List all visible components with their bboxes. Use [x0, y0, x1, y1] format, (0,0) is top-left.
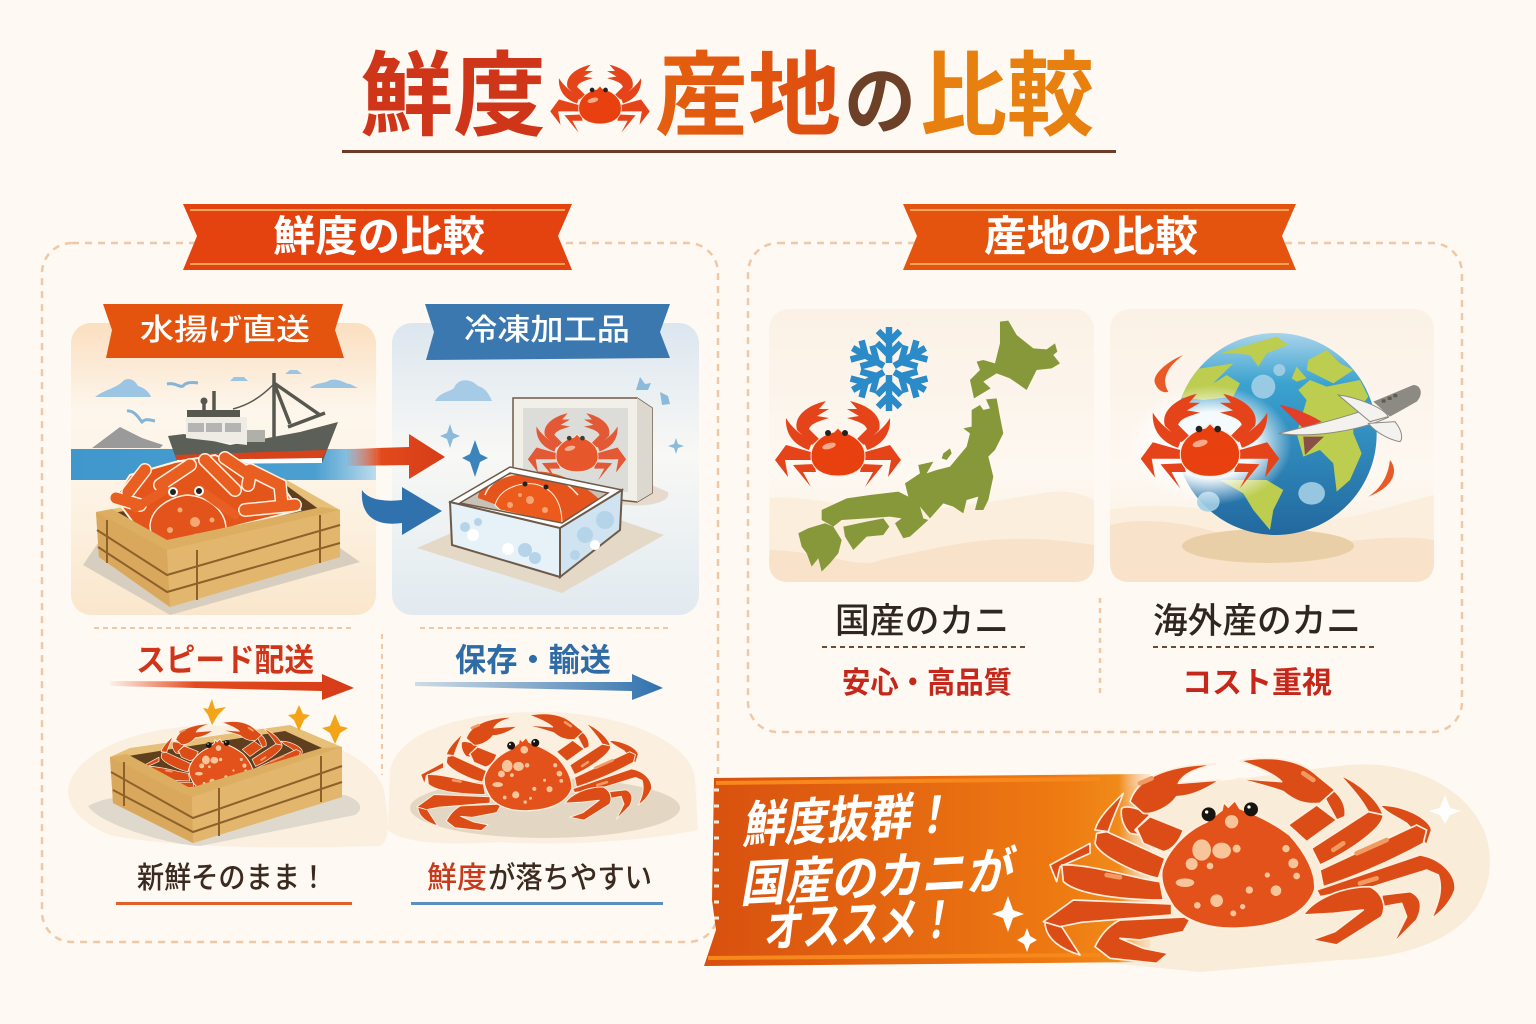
sea: [71, 449, 376, 480]
label: cost focus: コスト重視: [1182, 667, 1332, 700]
title: 鮮度: [360, 46, 546, 148]
icon: crab: [1141, 394, 1279, 488]
crate front: [96, 507, 340, 607]
motion marks: [1155, 355, 1394, 497]
foam box with crabs: [450, 467, 622, 528]
illustration: fresh crab crate: [68, 699, 388, 847]
icon: title crab: [550, 65, 650, 133]
callout text: オススメ！: [761, 892, 955, 958]
crate with crabs: [96, 455, 340, 607]
title: 比較: [920, 46, 1094, 148]
fishing boat: [168, 373, 338, 464]
crate front: [110, 747, 342, 843]
glow behind crab: [1128, 385, 1292, 505]
ribbon: frozen product: 冷凍加工品: [464, 314, 630, 347]
dividers: [94, 627, 672, 629]
arrow: blue to frozen card: [362, 487, 442, 535]
card: overseas crab: [1110, 309, 1434, 582]
dashed rule: domestic crab: [822, 646, 1028, 648]
label: storage and transport: 保存・輸送: [455, 642, 611, 678]
banner stripes: [708, 779, 1100, 958]
callout: recommendation banner: [704, 758, 1490, 972]
label: domestic crab: 国産のカニ: [835, 602, 1009, 641]
ribbon: direct from port: [103, 304, 344, 358]
ribbon: frozen product: [425, 304, 670, 360]
label: speed delivery: スピード配送: [136, 642, 314, 678]
underline: stays fresh: [116, 902, 352, 905]
panel: freshness comparison outline: [42, 243, 718, 942]
underline: freshness drops: [411, 902, 663, 905]
back box with frozen crab: [620, 480, 668, 506]
arrow: speed delivery: [110, 674, 354, 700]
callout text: 国産のカニが: [738, 842, 1020, 913]
heading ribbon: origin: 産地の比較: [984, 213, 1198, 260]
label: safe high quality: 安心・高品質: [842, 667, 1012, 700]
crate interior: [110, 725, 342, 797]
arrow: storage and transport: [415, 674, 663, 700]
illustration: frozen crab: [388, 712, 698, 844]
icon: crab: [775, 401, 901, 487]
dashed rule: overseas crab: [1153, 646, 1377, 648]
perforated edge: [714, 790, 719, 918]
clouds and birds: [95, 370, 358, 397]
title: [342, 46, 1116, 153]
caption: freshness drops: 鮮度: [427, 862, 487, 895]
ribbon: direct from port: 水揚げ直送: [140, 314, 310, 347]
illustration: large crab: [1043, 758, 1455, 963]
icon: airplane: [1278, 385, 1421, 455]
callout text: [738, 787, 1020, 958]
crab heap: [115, 455, 300, 545]
sparkles: [203, 699, 348, 744]
icon: globe: [1128, 333, 1421, 535]
sparkles: [462, 440, 488, 477]
icon: snowflake: [847, 327, 931, 411]
sparkles: [992, 795, 1461, 952]
heading ribbon: origin: [903, 204, 1296, 270]
title: 産地: [655, 46, 841, 148]
caption: stays fresh: 新鮮そのまま！: [137, 862, 327, 895]
crab: [417, 714, 652, 831]
card: frozen product: [392, 323, 699, 615]
panel: origin comparison outline: [748, 243, 1462, 732]
heading ribbon: freshness: 鮮度の比較: [273, 213, 485, 260]
heading ribbon: freshness: [183, 204, 572, 270]
label: overseas crab: 海外産のカニ: [1153, 602, 1361, 641]
map: Japan: [798, 321, 1060, 572]
caption: freshness drops: [427, 862, 652, 895]
cloud: [435, 380, 492, 401]
crate shadow: [83, 540, 360, 615]
caption: freshness drops: が落ちやすい: [488, 862, 652, 895]
arrow: red to frozen card: [347, 434, 445, 479]
divider between origin columns: [1099, 598, 1101, 698]
crab in crate: [139, 722, 312, 808]
island: [92, 427, 163, 448]
card: direct from port: [71, 323, 376, 615]
foam box shadow: [417, 520, 664, 593]
callout text: 鮮度抜群！: [740, 787, 953, 854]
title: の: [844, 60, 916, 145]
card: domestic crab: [769, 309, 1094, 582]
